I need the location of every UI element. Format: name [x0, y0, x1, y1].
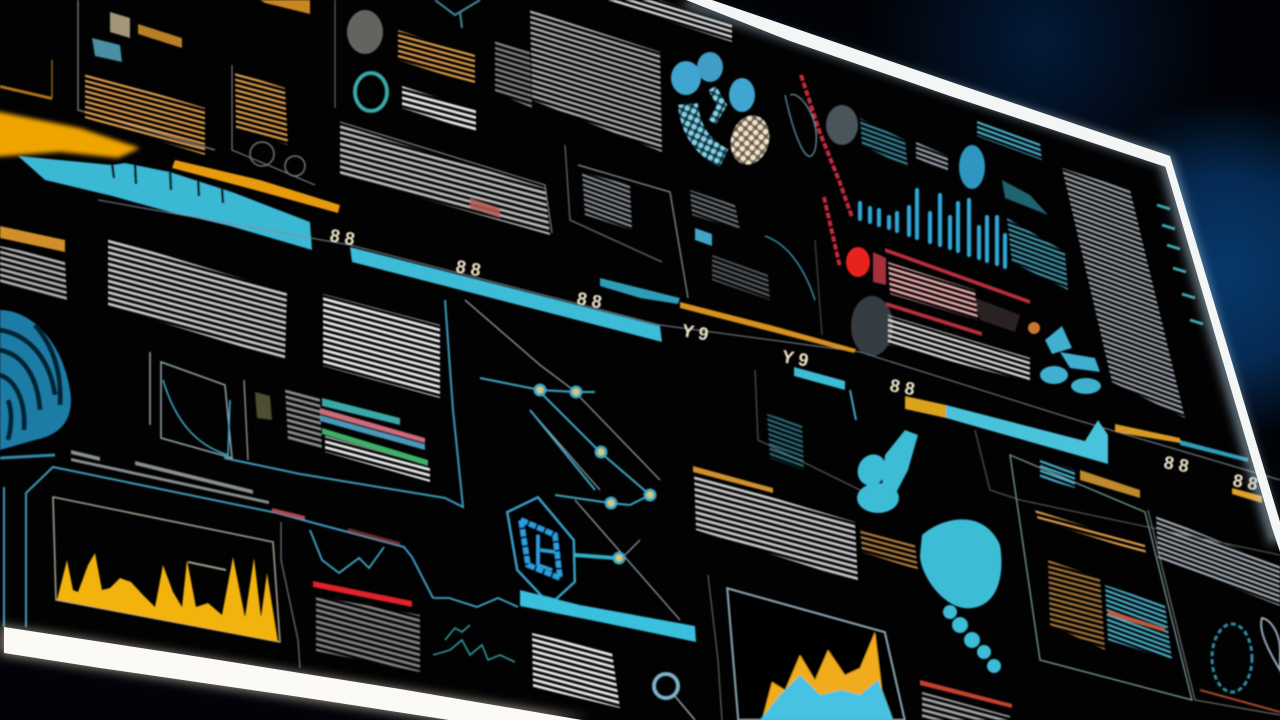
icon: cyan organ with chain	[920, 519, 1002, 673]
orange header bar	[0, 108, 140, 158]
icon: blue brain	[0, 310, 71, 450]
line chart: cyan trend	[310, 530, 518, 607]
panel: left column text with orange header	[0, 226, 67, 300]
panel: red-headed text block	[873, 248, 1040, 334]
icon: cyan leaf cluster	[1040, 326, 1101, 394]
panel: legend list with red heading	[313, 581, 420, 672]
icon: red heart shape	[846, 247, 870, 277]
panel: far-right long text column	[1062, 168, 1185, 418]
panel divider	[281, 522, 300, 668]
text block: far-right lower	[1156, 515, 1280, 606]
side ticks on right edge	[1157, 205, 1203, 324]
text block: centre	[323, 294, 440, 398]
text block: centre-lower with orange header	[693, 466, 858, 582]
panel: small line chart and colored table	[150, 352, 430, 482]
cyan and orange progress line	[600, 278, 856, 353]
panel: top-middle text columns with round icons	[335, 0, 732, 235]
orange accent line	[172, 160, 340, 213]
panel: top-right bar chart annotations	[785, 75, 1068, 290]
timeline labels: 8 8	[1231, 470, 1259, 494]
timeline labels: 8 8	[888, 375, 916, 399]
cyan progress segment mid	[794, 367, 845, 390]
chart: small teal scatter	[433, 625, 515, 662]
red labels on trend line	[272, 508, 400, 546]
panel: left frame with cyan lines	[4, 467, 433, 627]
screen frame: bottom bright edge	[4, 627, 582, 720]
timeline labels: 8 8	[328, 225, 356, 249]
panel frame: centre divider	[224, 300, 463, 507]
cyan bottom bar	[520, 590, 696, 642]
band across brain base	[0, 455, 55, 458]
panel: bottom-right orange and cyan dashboard	[1010, 455, 1192, 700]
panel: network detail with small chart	[565, 145, 822, 335]
screen frame: top bright edge	[686, 0, 1170, 167]
icon: blue and cream hexagon cluster	[671, 52, 775, 169]
text block: bottom red heading	[920, 680, 1012, 720]
timeline labels: Y 9	[680, 320, 710, 345]
timeline labels: Y 9	[780, 346, 810, 371]
timeline labels: 8 8	[454, 256, 482, 280]
icon: cyan anatomical shapes	[853, 430, 918, 513]
cyan progress bar segment	[350, 247, 662, 342]
text block: upper centre-left	[108, 238, 287, 360]
panel: mid-right small table	[755, 370, 918, 570]
timeline labels: 8 8	[1162, 452, 1190, 476]
orange and cyan progress segment right	[905, 396, 1262, 503]
icon: ring gauge	[654, 674, 695, 720]
timeline labels: 8 8	[575, 288, 603, 312]
panel: top-left report block	[0, 0, 315, 185]
bar chart: cyan bars	[860, 190, 1005, 267]
cyan header bar	[18, 156, 312, 250]
text block: thin bar labels	[71, 450, 269, 504]
panel: lower-right text block with brain icon	[851, 296, 1030, 382]
panel: network graph	[465, 300, 680, 620]
panel: far-right lower chart and icon	[975, 430, 1280, 715]
screen frame: right bright edge	[1164, 156, 1280, 552]
area chart: orange spikes in box	[53, 497, 280, 642]
icon: hexagon chip	[507, 497, 615, 605]
text block: bottom centre	[532, 633, 620, 708]
timeline labels	[328, 225, 1259, 494]
timeline: long thin divider	[98, 200, 1280, 480]
panel: bottom area chart	[708, 575, 905, 720]
